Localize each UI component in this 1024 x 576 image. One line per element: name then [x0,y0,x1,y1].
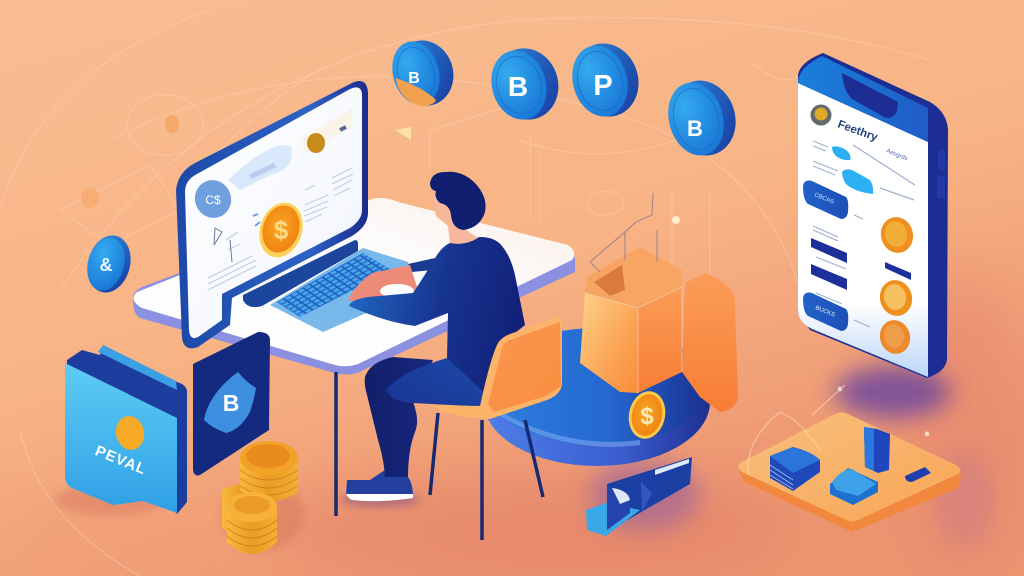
coin: top blue second: B [508,71,528,102]
shoe [340,470,420,507]
gold coin stacks [220,441,304,554]
phone pills and buttons: BUCKS [814,305,836,319]
monitor gold coin: $ [274,215,289,245]
far sleeve [408,258,435,272]
coin: left blue [81,231,137,297]
coin: top blue left [386,33,462,113]
coin: top blue left: B [408,70,420,87]
phone screen [798,83,928,377]
wallet label: PEVAL [93,442,149,478]
neck and face [432,190,478,244]
phone pills and buttons [803,146,911,331]
gold coin on platform [624,388,670,442]
wallet [55,345,187,516]
coin: top blue right [660,72,745,164]
dark security card: B [223,390,239,416]
monitor gold coin [252,197,310,263]
chair [430,318,562,540]
phone title: Feethry [836,119,880,144]
mouse [380,284,414,298]
stacked bank cards [586,457,692,536]
coin: top blue third: P [593,70,613,102]
monitor [176,81,368,348]
coin: left blue: & [100,255,112,275]
wallet coin [113,413,147,453]
phone avatar [810,104,832,126]
coin: top blue second [484,40,568,128]
small blue block [905,467,931,482]
desk [133,198,575,374]
laptop [243,240,412,332]
hair [430,172,486,230]
hands [348,265,418,306]
person [340,172,525,507]
phone text lines [813,141,915,327]
phone [798,53,948,378]
phone small text: Aeogrds [885,148,908,162]
blue block stack [770,447,820,491]
coin: top blue right: B [687,116,703,141]
dark security card [193,332,270,475]
keyboard [277,253,392,317]
phone gold coins [876,213,917,357]
legs [365,357,433,477]
monitor screen content [190,108,353,290]
torso and arm [349,237,525,398]
phone pills and buttons: CBCAS [813,192,835,206]
cyan block [830,468,878,505]
monitor screen content: C$ [205,193,221,207]
gold coin on platform: $ [640,403,654,430]
phone notch [842,73,898,118]
blue round platform [484,328,710,466]
orange parcel box [580,193,738,412]
coin: top blue third [564,35,648,125]
desk leg [334,372,338,516]
phone header [798,56,928,142]
isometric plate with blocks [737,385,962,532]
tall blue block [864,427,890,473]
